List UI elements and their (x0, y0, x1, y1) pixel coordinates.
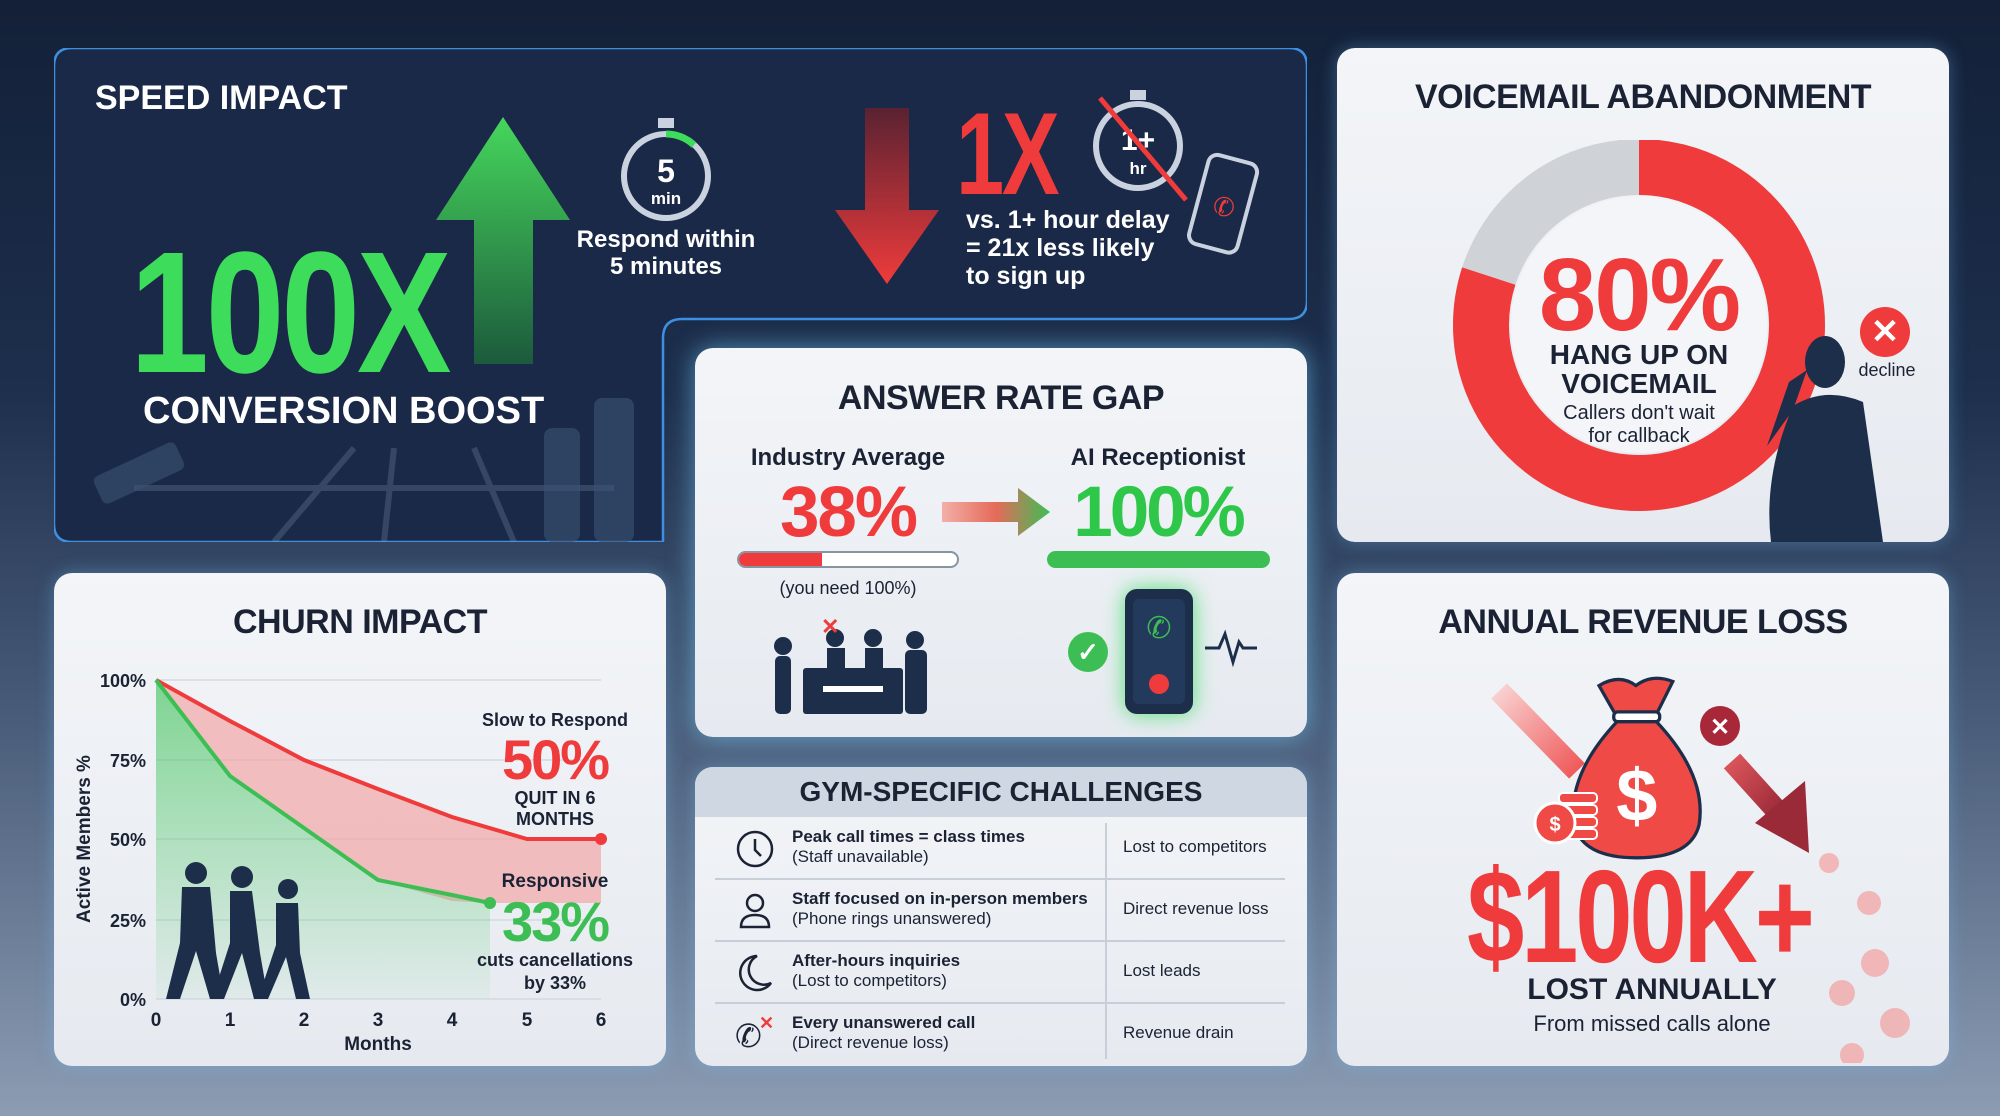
icon: 5 min stopwatch: min (651, 189, 681, 208)
text: respond within 5 minutes: 5 minutes (610, 253, 722, 280)
row: unanswered call: Every unanswered call (792, 1013, 975, 1032)
chart: churn line chart: 5 (522, 1010, 533, 1031)
stat: 38%: 38% (780, 473, 916, 552)
panel: voicemail abandonment (1337, 48, 1949, 542)
text: hang up on voicemail: HANG UP ON (1550, 339, 1728, 370)
heading: gym-specific challenges: GYM-SPECIFIC CHALLENGES (800, 776, 1202, 807)
text: you need 100%: (you need 100%) (779, 578, 917, 598)
label: decline: decline (1858, 360, 1916, 380)
icon: money bag with falling arrow: $ (1616, 754, 1657, 837)
icon: 5 min stopwatch: 5 (657, 153, 675, 189)
row: peak call times (736, 827, 1267, 868)
row: after-hours: (Lost to competitors) (792, 971, 947, 990)
text: lost annually: LOST ANNUALLY (1527, 973, 1777, 1006)
text: hang up on voicemail (1550, 339, 1728, 399)
text: 21x less likely (966, 206, 1170, 290)
text: 21x less likely: = 21x less likely (966, 234, 1154, 262)
text: respond within 5 minutes (577, 226, 755, 280)
heading: churn impact: CHURN IMPACT (233, 603, 487, 641)
label: ai receptionist: AI Receptionist (1071, 444, 1245, 471)
panel: churn impact (54, 573, 666, 1066)
icon: check: ✓ (1077, 637, 1099, 667)
row: after-hours (739, 951, 1200, 992)
arrow: red to green (942, 488, 1050, 536)
row: unanswered call: ✕ (759, 1013, 774, 1033)
text: from missed calls: From missed calls alone (1533, 1011, 1771, 1036)
icon: crossed 1hr stopwatch: 1+ (1121, 124, 1155, 157)
text: hang up on voicemail: VOICEMAIL (1561, 368, 1717, 399)
icon: silhouette man on phone (1767, 336, 1883, 542)
panel: gym-specific challenges (695, 767, 1307, 1066)
arrow: green up (436, 117, 570, 364)
label: conversion boost: CONVERSION BOOST (143, 390, 544, 432)
row: unanswered call: (Direct revenue loss) (792, 1033, 949, 1052)
chart: churn line chart: Active Members % (74, 755, 95, 923)
row: after-hours: Lost leads (1123, 961, 1200, 980)
panel: annual revenue loss (1337, 573, 1949, 1066)
row: unanswered call (735, 1013, 1234, 1054)
icon: phone answering (1125, 589, 1193, 714)
chart: churn line chart: 1 (225, 1010, 236, 1031)
callout: responsive 33%: Responsive (502, 871, 608, 892)
heading: answer rate gap: ANSWER RATE GAP (838, 379, 1164, 417)
row: staff focused (740, 889, 1269, 928)
icon: check (1068, 632, 1108, 672)
bar: 38% (737, 551, 959, 568)
chart: donut 80% (1453, 140, 1825, 511)
callout: slow to respond 50%: 50% (502, 728, 608, 791)
chart: churn line chart: 6 (596, 1010, 606, 1031)
icon: money bag with falling arrow: ✕ (1710, 714, 1730, 741)
icon: decline x (1860, 307, 1910, 357)
icon: money bag with falling arrow: $ (1549, 814, 1561, 836)
chart: churn line chart (74, 671, 607, 1055)
stat: 1X: 1X (956, 88, 1057, 219)
stat: 100X: 100X (130, 215, 448, 409)
text: 21x less likely: vs. 1+ hour delay (966, 206, 1170, 234)
row: after-hours: After-hours inquiries (792, 951, 960, 970)
callout: responsive 33% (477, 871, 633, 993)
chart: churn line chart: 0% (120, 990, 146, 1010)
icon: busy reception desk (774, 616, 927, 714)
chart: churn line chart: 3 (373, 1010, 383, 1031)
heading: voicemail abandonment: VOICEMAIL ABANDONMENT (1415, 78, 1871, 116)
row: staff focused: (Phone rings unanswered) (792, 909, 991, 928)
row: unanswered call: Revenue drain (1123, 1023, 1234, 1042)
icon: heartbeat (1205, 630, 1257, 668)
chart: churn line chart: Months (344, 1034, 412, 1055)
icon: money bag with falling arrow (1491, 676, 1910, 1063)
arrow: red down (835, 108, 939, 284)
heading: speed impact: SPEED IMPACT (95, 79, 348, 117)
text: respond within 5 minutes: Respond within (577, 226, 755, 253)
chart: churn line chart: 4 (447, 1010, 458, 1031)
text: callers don't wait: Callers don't wait (1563, 402, 1715, 424)
stat: 80%: 80% (1539, 237, 1739, 352)
heading: annual revenue loss: ANNUAL REVENUE LOSS (1438, 603, 1848, 641)
callout: responsive 33%: cuts cancellations (477, 950, 633, 970)
chart: churn line chart: 0 (151, 1010, 161, 1031)
row: peak call times: (Staff unavailable) (792, 847, 929, 866)
callout: slow to respond 50%: MONTHS (516, 809, 594, 829)
panel: answer rate gap (695, 348, 1307, 737)
row: staff focused: Staff focused on in-person members (792, 889, 1088, 908)
icon: 5 min stopwatch (621, 118, 711, 221)
callout: slow to respond 50%: Slow to Respond (482, 710, 628, 730)
icon: phone missed (1187, 152, 1260, 255)
callout: slow to respond 50%: QUIT IN 6 (514, 788, 596, 808)
icon: phone missed: ✆ (1213, 192, 1235, 222)
icon: crossed 1hr stopwatch: hr (1130, 159, 1147, 178)
chart: churn line chart: 2 (299, 1010, 309, 1031)
bar: 100% (1047, 551, 1270, 568)
callout: responsive 33%: 33% (502, 890, 608, 953)
icon: decline x: ✕ (1871, 313, 1899, 351)
chart: churn line chart: 25% (110, 911, 146, 931)
icon: phone answering: ✆ (1146, 612, 1172, 645)
stat: $100K+: $100K+ (1467, 843, 1812, 990)
text: callers don't wait: for callback (1588, 425, 1690, 447)
chart: churn line chart: 50% (110, 830, 146, 850)
row: peak call times: Peak call times = class times (792, 827, 1025, 846)
text: 21x less likely: to sign up (966, 262, 1085, 290)
icon: crossed 1hr stopwatch (1093, 90, 1188, 202)
chart: churn line chart: 100% (100, 671, 146, 691)
callout: slow to respond 50% (482, 710, 628, 829)
row: staff focused: Direct revenue loss (1123, 899, 1269, 918)
stat: 100%: 100% (1073, 473, 1243, 552)
row: unanswered call: ✆ (735, 1018, 762, 1054)
label: industry average: Industry Average (751, 444, 945, 471)
text: callers don't wait (1563, 402, 1715, 447)
callout: responsive 33%: by 33% (524, 973, 586, 993)
heading: gym-specific challenges (695, 767, 1307, 817)
chart: churn line chart: 75% (110, 751, 146, 771)
table: challenges (715, 823, 1285, 1059)
row: peak call times: Lost to competitors (1123, 837, 1267, 856)
